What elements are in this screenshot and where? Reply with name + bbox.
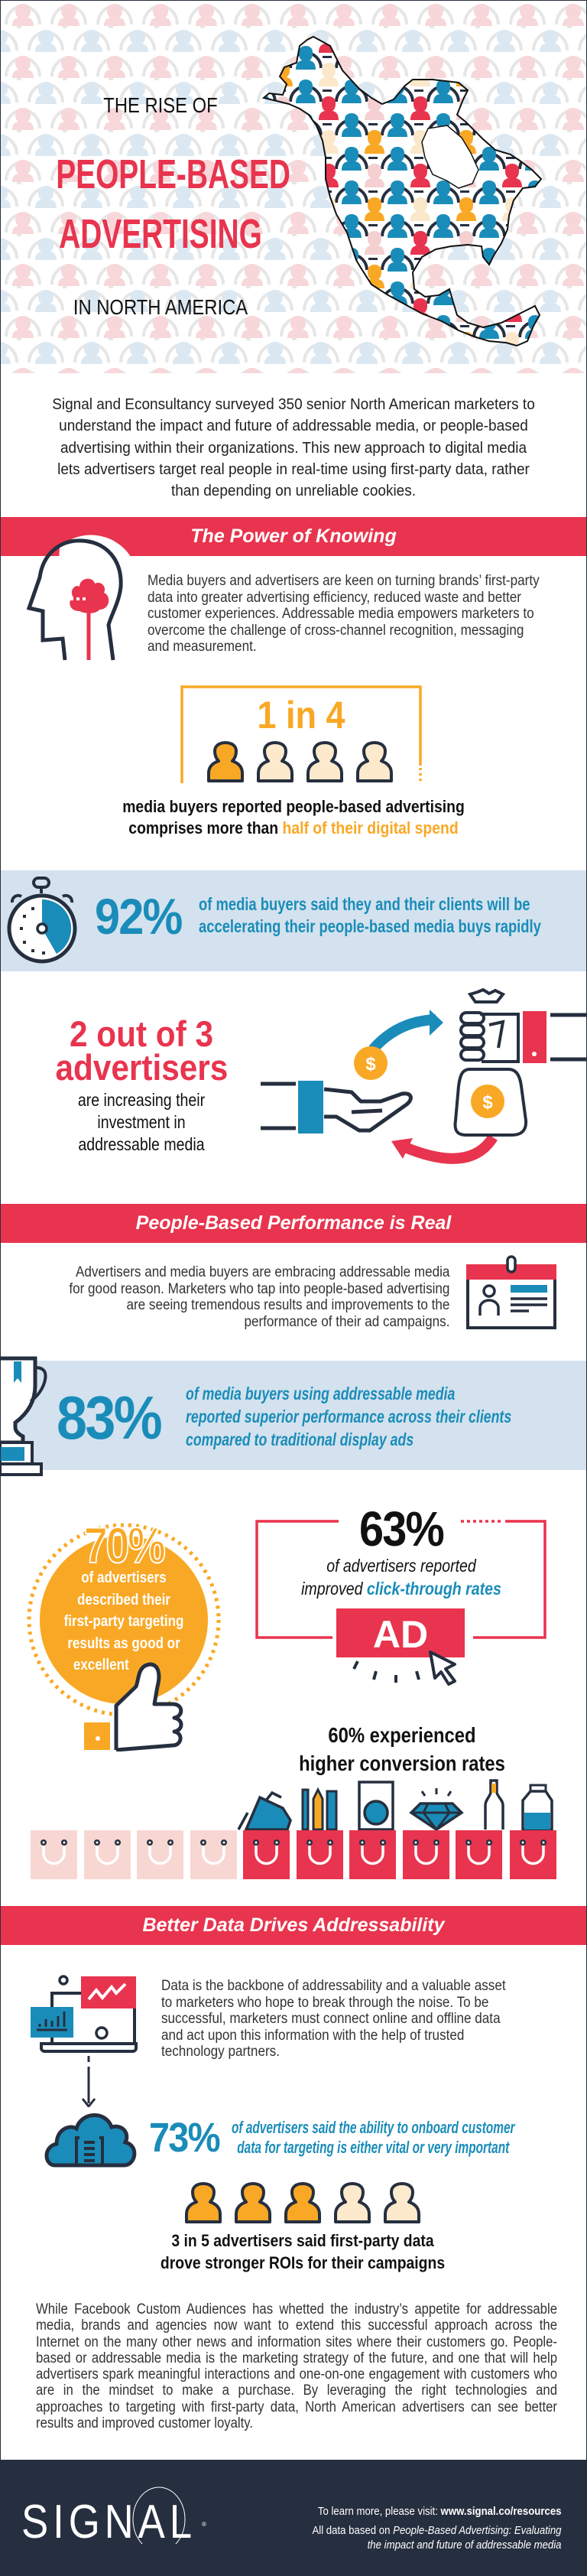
hero background pattern: [1, 4, 586, 373]
icon: laptop with charts: [31, 1975, 138, 2107]
intro text: Signal and Econsultancy surveyed 350 senior North American marketers to: [52, 396, 535, 413]
intro text: advertising within their organizations. This new approach to digital media: [60, 440, 527, 457]
map of North America: [262, 35, 543, 346]
caption: 3 in 5: drove stronger ROIs for their campaigns: [161, 2253, 445, 2272]
title: IN NORTH AMERICA: [73, 295, 248, 319]
caption: 60%: [299, 1723, 505, 1775]
stat: 2 out of 3: are increasing their: [78, 1090, 205, 1110]
text block: power of knowing: Media buyers and advertisers are keen on turning brands’ first-party: [148, 573, 540, 589]
text block: power of knowing: overcome the challenge of cross-channel recognition, messaging: [148, 623, 524, 638]
panel: 92% stat: of media buyers said they and their clients will be: [199, 894, 530, 914]
band: The Power of Knowing: The Power of Knowing: [190, 525, 397, 547]
caption: 60%: 60% experienced: [328, 1723, 476, 1747]
text block: data: to marketers who hope to break through the noise. To be: [161, 1995, 488, 2010]
band: Better Data Drives Addressability: Better Data Drives Addressability: [142, 1914, 445, 1936]
stat: 2 out of 3: addressable media: [78, 1134, 205, 1154]
icon: head: [26, 535, 130, 661]
stat: 3 in 5 people: [185, 2182, 420, 2223]
band: People-Based Performance is Real: People-Based Performance is Real: [136, 1212, 451, 1234]
stat: 2 out of 3: [55, 1013, 228, 1154]
footer: [0, 2460, 587, 2576]
intro text: understand the impact and future of addressable media, or people-based: [59, 418, 528, 434]
footer text: the impact and future of addressable media: [368, 2539, 562, 2552]
title: ADVERTISING: [59, 211, 262, 257]
panel: 92% stat: accelerating their people-based media buys rapidly: [199, 916, 541, 936]
footer text: All data based on People-Based Advertising: Evaluating: [313, 2524, 562, 2537]
stat: 63% ad box: [255, 1501, 546, 1686]
intro text: lets advertisers target real people in real-time using first-party data, rather: [57, 461, 530, 478]
icon: cloud: [44, 2113, 136, 2168]
logo: SIGNAL: SIGNAL: [21, 2496, 196, 2548]
text block: performance: are seeing tremendous results and improvements to the: [126, 1297, 449, 1313]
panel: 83% stat: reported superior performance across their clients: [186, 1407, 511, 1426]
caption: 1 in 4: media buyers reported people-based advertising: [122, 797, 465, 816]
stat: 63% ad box: improved click-through rates: [301, 1579, 501, 1599]
stat: 70% circle: [28, 1517, 220, 1751]
logo: SIGNAL: ®: [202, 2521, 206, 2528]
icon: profile card: [466, 1255, 556, 1329]
stat: 63% ad box: AD: [373, 1613, 428, 1656]
title: PEOPLE-BASED: [56, 151, 290, 197]
footer text: To learn more, please visit: www.signal.co/resources: [318, 2505, 562, 2518]
stat: 70% circle: excellent: [73, 1657, 129, 1673]
icon: stopwatch: [8, 877, 76, 964]
stat: 70% circle: described their: [77, 1591, 170, 1608]
text block: performance: performance of their ad campaigns.: [244, 1314, 449, 1329]
stat: 70% circle: first-party targeting: [64, 1613, 183, 1630]
icons: products: [237, 1779, 553, 1830]
icon: money exchange: [261, 988, 586, 1164]
text block: data: successful, marketers must connect online and offline data: [161, 2011, 501, 2027]
stat: 2 out of 3: advertisers: [55, 1047, 228, 1088]
stat: 2 out of 3: investment in: [97, 1112, 186, 1132]
caption: 3 in 5: 3 in 5 advertisers said first-party data: [171, 2231, 434, 2250]
panel: 83% stat: compared to traditional display ads: [186, 1429, 413, 1449]
stat: 70% circle: of advertisers: [81, 1569, 167, 1586]
stat: 63% ad box: 63%: [359, 1501, 443, 1556]
text block: data: technology partners.: [161, 2044, 280, 2060]
footer text: [312, 2505, 562, 2552]
stat: 73%: [149, 2115, 515, 2161]
text block: data: and act upon this information with the help of trusted: [161, 2027, 464, 2044]
stat: 1 in 4: 1 in 4: [257, 694, 345, 737]
text block: conclusion: While Facebook Custom Audiences has whetted the industry’s appetite for addressable media, brands and agencies now want to extend this successful approach across the Internet on the many other news and information sites where their customers go. People-based or addressable media is the marketing strategy of the future, and one that will help advertisers spark meaningful interactions and one-on-one engagement with customers who are in the mindset to make a purchase. By leveraging the right technologies and approaches to targeting with first-party data, North American advertisers can see better results and improved customer loyalty.: [36, 2301, 557, 2431]
stat: 70% circle: results as good or: [67, 1635, 180, 1652]
intro text: than depending on unreliable cookies.: [171, 483, 416, 499]
text block: power of knowing: [148, 573, 540, 655]
stat: 2 out of 3: 2 out of 3: [70, 1013, 213, 1054]
stat: 73%: data for targeting is either vital or very important: [237, 2138, 509, 2157]
icon: money exchange: $: [365, 1054, 376, 1075]
text block: power of knowing: and measurement.: [148, 639, 257, 655]
caption: 1 in 4: comprises more than half of their digital spend: [128, 818, 459, 838]
title: THE RISE OF: [103, 93, 218, 117]
text block: performance: [69, 1264, 449, 1329]
stat: 63% ad box: of advertisers reported: [326, 1556, 476, 1576]
panel: 92% stat: [0, 870, 587, 971]
icon: trophy: [1, 1357, 47, 1476]
stat: 73%: 73%: [149, 2115, 219, 2161]
chart: shopping bags: [31, 1779, 556, 1879]
stat: 70% circle: 70%: [84, 1517, 164, 1573]
text block: data: Data is the backbone of addressability and a valuable asset: [161, 1978, 506, 1994]
stat: 1 in 4: [180, 685, 422, 783]
band: The Power of Knowing: [0, 517, 587, 556]
text block: performance: for good reason. Marketers who tap into people-based advertising: [69, 1280, 449, 1297]
caption: 3 in 5: [161, 2231, 445, 2272]
panel: 83% stat: of media buyers using addressable media: [186, 1384, 455, 1403]
text block: power of knowing: data into greater advertising efficiency, reduced waste and better: [148, 589, 521, 606]
band: People-Based Performance is Real: [0, 1204, 587, 1243]
caption: 60%: higher conversion rates: [299, 1751, 505, 1775]
panel: 83% stat: [0, 1361, 587, 1470]
text block: performance: Advertisers and media buyers are embracing addressable media: [75, 1264, 449, 1280]
icon: money exchange: $: [482, 1092, 493, 1113]
band: Better Data Drives Addressability: [0, 1906, 587, 1945]
caption: 1 in 4: [122, 797, 465, 838]
intro text: [52, 396, 535, 499]
text block: data: [161, 1978, 506, 2060]
title: [56, 93, 290, 319]
panel: 92% stat: 92%: [95, 888, 181, 945]
text block: power of knowing: customer experiences. Addressable media empowers marketers to: [148, 606, 534, 622]
panel: 83% stat: 83%: [57, 1384, 161, 1452]
stat: 73%: of advertisers said the ability to onboard customer: [232, 2118, 515, 2137]
